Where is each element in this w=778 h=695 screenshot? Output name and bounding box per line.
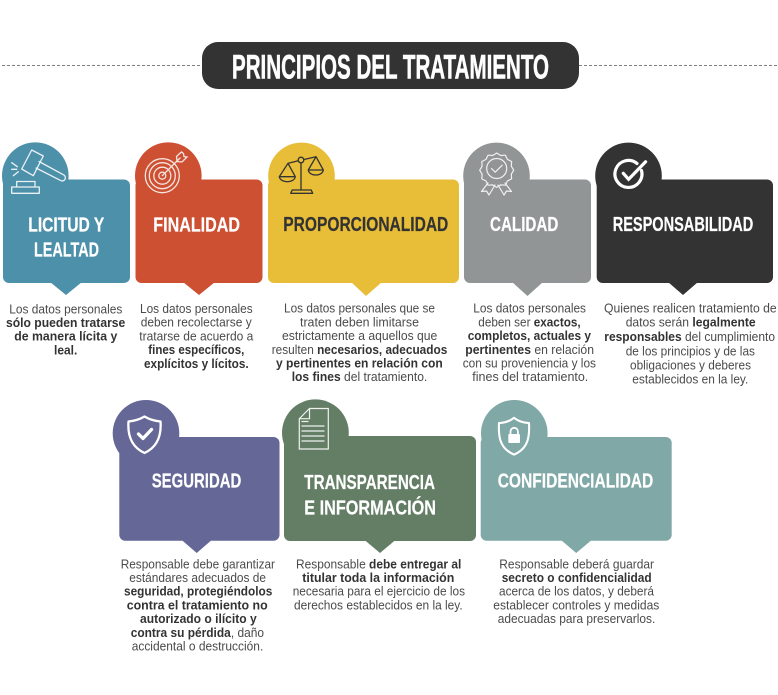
description: derechos establecidos en la ley. [294,598,463,612]
description: pertinentes en relación [465,343,594,357]
card: finalidad [135,142,262,371]
description: contra el tratamiento no [127,598,268,612]
description: y pertinentes en relación con [276,356,443,370]
card: proporcionalidad [268,143,459,384]
description: Los datos personales [473,302,586,316]
card shape [463,143,591,296]
description [604,302,777,386]
card shape [481,400,672,553]
icon: check in circle [615,160,646,187]
title: PRINCIPIOS DEL TRATAMIENTO [232,48,549,86]
card: calidad [463,143,596,384]
icon: document [299,408,328,449]
description: accidental o destrucción. [132,640,263,654]
description: con su proveniencia y los [463,356,596,370]
description: explícitos y lícitos. [144,357,249,371]
description: adecuadas para preservarlos. [498,612,655,626]
card shape [113,400,280,553]
description: Los datos personales [9,302,122,316]
heading: PROPORCIONALIDAD [283,213,448,236]
description [139,302,253,371]
description [493,557,659,626]
card: licitud y lealtad [2,142,130,357]
description: de manera lícita y [14,330,117,344]
description: fines específicos, [148,343,244,357]
description: Los datos personales [140,302,253,316]
description [6,302,125,357]
card shape [2,142,130,295]
description: Responsable debe garantizar [121,557,275,571]
heading: LEALTAD [34,239,99,262]
card shape [135,142,262,295]
description [463,302,596,384]
description: Responsable debe entregar al [296,557,461,571]
title [202,42,579,89]
description: deben recolectarse y [141,316,252,330]
card: responsabilidad [595,143,777,386]
description: leal. [54,343,77,357]
description: fines del tratamiento. [472,370,588,384]
description: resulten necesarios, adecuados [272,343,447,357]
description: necesaria para el ejercicio de los [293,585,465,599]
card shape [595,143,773,295]
description: los fines del tratamiento. [292,370,427,384]
icon: shield with check [128,416,161,453]
description: titular toda la información [302,571,454,585]
heading [304,471,436,520]
description: completos, actuales y [468,329,591,343]
card: confidencialidad [481,400,672,626]
card shape [282,399,476,553]
heading: E INFORMACIÓN [304,496,436,520]
card shape [268,143,459,296]
description: contra su pérdida, daño [131,626,264,640]
heading: TRANSPARENCIA [304,471,435,494]
description: de los principios y de las [626,344,755,358]
card: transparencia e informacion [282,399,476,612]
description [121,557,275,654]
description: estrictamente a aquellos que [282,329,437,343]
description: obligaciones y deberes [630,358,751,372]
card: seguridad [113,400,280,654]
description: estándares adecuados de [129,571,266,585]
description: Responsable deberá guardar [499,557,654,571]
description: Quienes realicen tratamiento de [604,302,777,316]
heading: CONFIDENCIALIDAD [498,469,653,492]
heading: CALIDAD [490,213,558,236]
description: traten deben limitarse [300,315,419,329]
description [293,557,465,612]
description: responsables del cumplimiento [604,330,775,344]
icon: target [145,152,187,193]
icon: gavel [12,150,65,193]
description: deben ser exactos, [478,315,581,329]
icon: scales [279,157,323,193]
heading: SEGURIDAD [152,469,241,492]
description: autorizado o ilícito y [140,612,257,626]
description: Los datos personales que se [284,302,435,316]
description: establecer controles y medidas [493,598,659,612]
heading: FINALIDAD [153,214,240,237]
icon: shield with padlock [499,418,529,455]
description: acerca de los datos, y deberá [499,585,654,599]
description: seguridad, protegiéndolos [124,585,272,599]
description: tratarse de acuerdo a [139,329,253,343]
heading [28,214,105,262]
description: datos serán legalmente [626,316,756,330]
description: sólo pueden tratarse [6,316,125,330]
icon: seal with ribbons [480,153,514,195]
description: establecidos en la ley. [632,372,748,386]
description: secreto o confidencialidad [502,571,652,585]
description [272,302,447,384]
heading: LICITUD Y [28,214,105,237]
